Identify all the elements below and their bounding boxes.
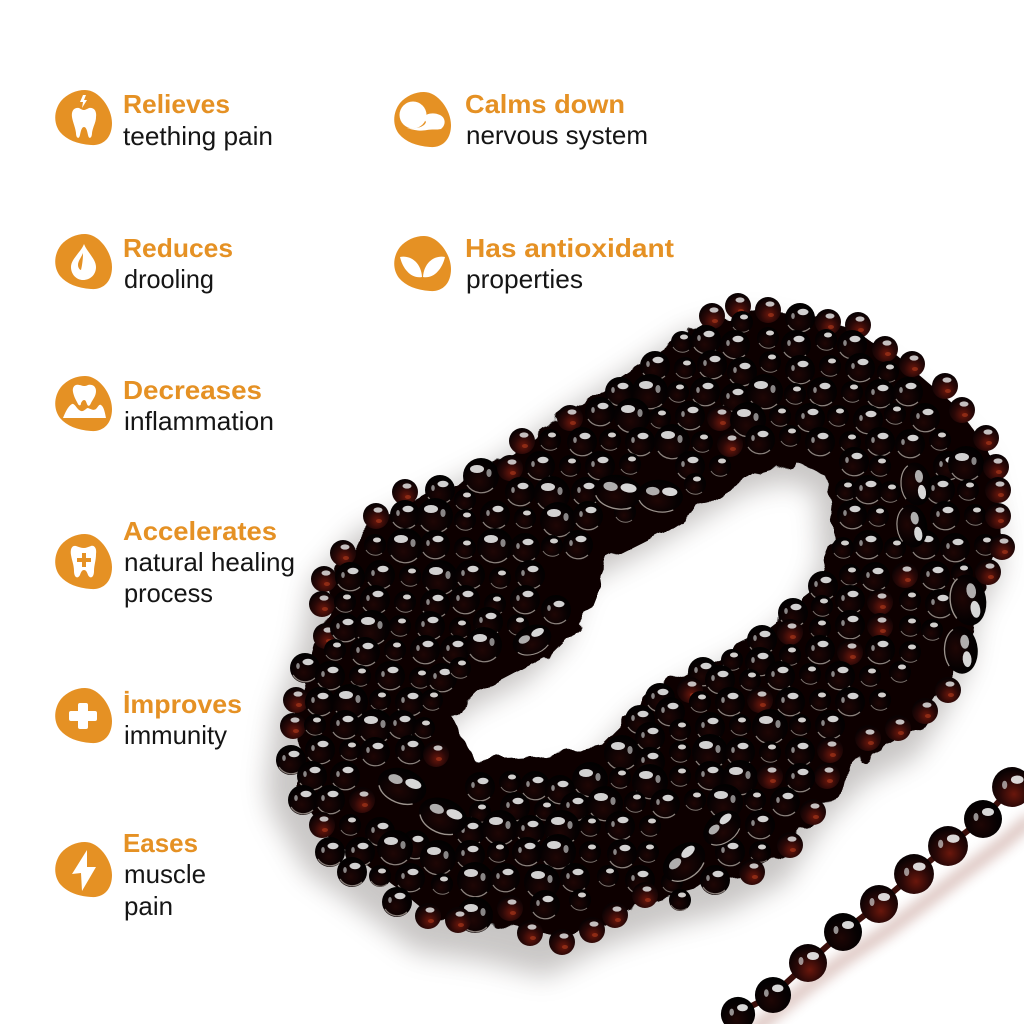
loose bead strand shadow [747, 818, 1024, 1024]
loose bead strand [721, 767, 1024, 1024]
benefit: eases muscle pain: Eases [123, 828, 198, 858]
benefit: relieves teething pain [55, 89, 273, 151]
benefit: accelerates natural healing: natural healing [124, 547, 295, 577]
amber bead necklace bundle [276, 293, 1015, 955]
benefit: reduces drooling: drooling [124, 264, 214, 294]
icon: sleeping baby [394, 92, 451, 147]
benefit: antioxidant properties: Has antioxidant [465, 233, 674, 263]
benefit: eases muscle pain [55, 828, 206, 921]
icon: lightning bolt [55, 842, 112, 897]
benefit: reduces drooling [55, 233, 233, 294]
benefit: decreases inflammation [55, 375, 274, 436]
benefit: antioxidant properties: properties [466, 264, 583, 294]
benefit: calms nervous system [394, 89, 648, 150]
benefit: calms nervous system: Calms down [465, 89, 625, 119]
icon: two leaves [394, 236, 451, 291]
benefit: improves immunity: immunity [124, 720, 227, 750]
benefit: eases muscle pain: muscle [124, 859, 206, 889]
benefit: accelerates natural healing: Accelerates [123, 516, 277, 546]
benefit: reduces drooling: Reduces [123, 233, 233, 263]
benefit: relieves teething pain: Relieves [123, 89, 230, 119]
benefit: antioxidant properties [394, 233, 674, 294]
benefit: calms nervous system: nervous system [466, 120, 648, 150]
icon: tooth with plus [55, 534, 112, 589]
benefit: decreases inflammation: inflammation [124, 406, 274, 436]
benefit: eases muscle pain: pain [124, 891, 173, 921]
benefit: accelerates natural healing: process [124, 578, 213, 608]
icon: tooth in gum [55, 376, 112, 431]
necklace shadow [266, 317, 1001, 977]
icon: water drop [55, 234, 112, 289]
benefit: improves immunity [55, 688, 242, 750]
benefit: accelerates natural healing [55, 516, 295, 608]
benefit: decreases inflammation: Decreases [123, 375, 262, 405]
benefit: relieves teething pain: teething pain [123, 121, 273, 151]
benefit: improves immunity: İmproves [123, 689, 242, 719]
icon: tooth with bolt [55, 90, 112, 145]
icon: plus [55, 688, 112, 743]
